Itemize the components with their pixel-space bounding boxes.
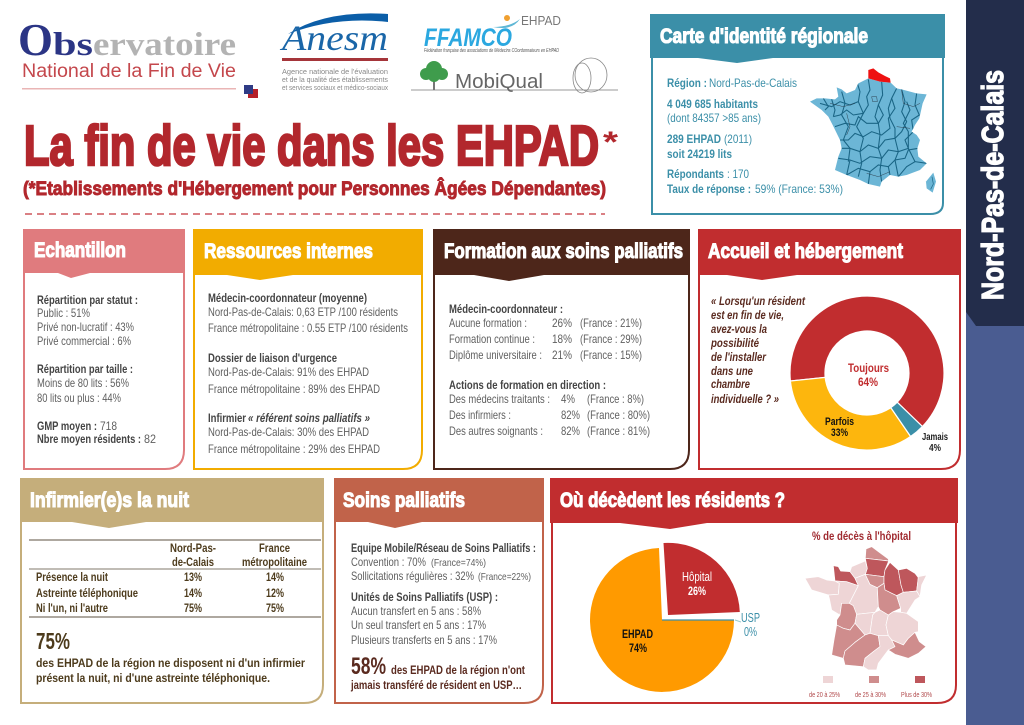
logo: FFAMCO EHPAD bbox=[424, 13, 561, 54]
logo: FFAMCO EHPAD: FFAMCO bbox=[424, 24, 512, 52]
subtitle: (*Etablissements d'Hébergement pour Personnes Âgées Dépendantes) bbox=[23, 178, 606, 200]
text: actions de formation: (France : 80%) bbox=[587, 408, 650, 422]
text: question: individuelle ? » bbox=[711, 392, 779, 406]
text: équipes et unités: Un seul transfert en 5 ans : 17% bbox=[351, 618, 486, 632]
text: question bbox=[710, 294, 806, 406]
text: médecin-coordonnateur: (France : 29%) bbox=[580, 332, 642, 346]
text: répartition de l'échantillon: Privé commercial : 6% bbox=[37, 334, 131, 348]
donut chart: possibilité de chambre individuelle: Parfois bbox=[825, 416, 854, 428]
table: présence infirmière: métropolitaine bbox=[242, 555, 307, 569]
text: médecin-coordonnateur: Formation continue : bbox=[449, 332, 535, 346]
text: médecin-coordonnateur: Aucune formation : bbox=[449, 316, 527, 330]
table: présence infirmière: 13% bbox=[184, 570, 202, 584]
text: répartition de l'échantillon: Répartition par taille : bbox=[37, 362, 133, 376]
text: répartition de l'échantillon: 82 bbox=[144, 432, 156, 446]
callout: 75%: 75% bbox=[36, 628, 70, 654]
text: ressources: Dossier de liaison d'urgence bbox=[208, 351, 337, 365]
pie chart: lieu de décès: Hôpital bbox=[682, 570, 712, 584]
heading: où décèdent: Où décèdent les résidents ? bbox=[560, 489, 785, 512]
text: ressources: Infirmier bbox=[208, 411, 246, 425]
panel: carte d'identité régionale bbox=[650, 14, 945, 214]
panel: où décèdent les résidents bbox=[550, 478, 958, 703]
text: répartition de l'échantillon: Public : 51% bbox=[37, 306, 90, 320]
table: présence infirmière: 75% bbox=[184, 601, 202, 615]
heading: echantillon: Echantillon bbox=[34, 239, 126, 262]
text: médecin-coordonnateur: 18% bbox=[552, 332, 572, 346]
callout: 58%: jamais transféré de résident en USP… bbox=[350, 678, 522, 692]
logo: Observatoire National de la Fin de Vie bbox=[18, 14, 258, 98]
logo: Anesm: et de la qualité des établissements bbox=[282, 77, 388, 84]
pie chart: lieu de décès: USP bbox=[741, 610, 760, 625]
text: identité de la région: Taux de réponse : bbox=[667, 182, 751, 196]
donut chart: possibilité de chambre individuelle: Toujours bbox=[848, 361, 889, 375]
text: ressources bbox=[208, 291, 408, 456]
text: répartition de l'échantillon: Moins de 80 lits : 56% bbox=[37, 376, 129, 390]
table: présence infirmière: Astreinte téléphonique bbox=[36, 586, 138, 600]
text: actions de formation: 4% bbox=[561, 392, 575, 406]
text: actions de formation: Des médecins traitants : bbox=[449, 392, 550, 406]
logo: Anesm: Agence nationale de l'évaluation bbox=[282, 69, 388, 76]
donut chart: possibilité de chambre individuelle: 4% bbox=[929, 443, 941, 454]
text: répartition de l'échantillon: 80 lits ou plus : 44% bbox=[37, 391, 121, 405]
text: ressources: France métropolitaine : 89% des EHPAD bbox=[208, 382, 380, 396]
text: identité de la région: soit 24219 lits bbox=[667, 147, 732, 161]
heading: carte d'identité: Carte d'identité régionale bbox=[660, 25, 868, 48]
map heading: % de décès à l'hôpital: % de décès à l'hôpital bbox=[812, 529, 911, 543]
text: identité de la région bbox=[667, 76, 843, 196]
text: identité de la région: (2011) bbox=[724, 132, 752, 146]
text: question: dans une bbox=[711, 364, 753, 378]
text: ressources: Nord-Pas-de-Calais: 0,63 ETP /100 résidents bbox=[208, 305, 398, 319]
table: présence infirmière: 12% bbox=[266, 586, 284, 600]
donut chart: possibilité de chambre individuelle bbox=[790, 296, 948, 454]
text: identité de la région: Répondants bbox=[667, 167, 724, 181]
panel: infirmier(e)s la nuit bbox=[20, 478, 324, 703]
text: question: possibilité bbox=[710, 336, 759, 350]
table: présence infirmière: 75% bbox=[266, 601, 284, 615]
text: équipes et unités: (France=74%) bbox=[431, 557, 486, 569]
text: identité de la région: 289 EHPAD bbox=[667, 132, 721, 146]
text: répartition de l'échantillon: GMP moyen : bbox=[37, 419, 97, 433]
logo: MobiQual: MobiQual bbox=[455, 71, 543, 93]
text: ressources: Nord-Pas-de-Calais: 30% des EHPAD bbox=[208, 425, 369, 439]
text: équipes et unités: Convention : 70% bbox=[351, 555, 426, 569]
table: présence infirmière: France bbox=[259, 541, 290, 555]
text: ressources: France métropolitaine : 0.55 ETP /100 résidents bbox=[208, 321, 408, 335]
text: actions de formation: (France : 81%) bbox=[587, 424, 650, 438]
text: actions de formation: Actions de formation en direction : bbox=[449, 378, 606, 392]
text: répartition de l'échantillon: Répartition par statut : bbox=[37, 293, 138, 307]
logo: Observatoire National de la Fin de Vie: bs bbox=[53, 27, 93, 63]
text: identité de la région: 4 049 685 habitants bbox=[667, 97, 758, 111]
text: ressources: France métropolitaine : 29% des EHPAD bbox=[208, 442, 380, 456]
heading: ressources internes: Ressources internes bbox=[204, 240, 373, 263]
text: médecin-coordonnateur: 26% bbox=[552, 316, 572, 330]
donut chart: possibilité de chambre individuelle: Jamais bbox=[922, 432, 948, 443]
logo: Anesm bbox=[280, 13, 388, 92]
text: équipes et unités: Unités de Soins Palliatifs (USP) : bbox=[351, 590, 498, 604]
title: * bbox=[603, 126, 618, 159]
text: identité de la région: 59% (France: 53%) bbox=[755, 182, 843, 196]
text: actions de formation: Des infirmiers : bbox=[449, 408, 511, 422]
text: répartition de l'échantillon: 718 bbox=[100, 419, 117, 433]
callout: 75%: des EHPAD de la région ne disposent ni d'un infirmier bbox=[36, 656, 305, 670]
legend: pourcentages bbox=[809, 676, 932, 699]
text: identité de la région: (dont 84357 >85 ans) bbox=[667, 111, 761, 125]
logo: Observatoire National de la Fin de Vie: ervatoire bbox=[93, 27, 236, 63]
table: présence infirmière bbox=[29, 540, 321, 617]
map: France with region highlighted bbox=[810, 68, 936, 193]
text: question: de l'installer bbox=[711, 350, 767, 364]
text: équipes et unités: Equipe Mobile/Réseau de Soins Palliatifs : bbox=[351, 541, 536, 555]
text: question: avez-vous la bbox=[711, 322, 767, 336]
legend: pourcentages: de 20 à 25% bbox=[809, 690, 840, 699]
callout: 58%: des EHPAD de la région n'ont bbox=[391, 663, 525, 677]
text: médecin-coordonnateur: (France : 21%) bbox=[580, 316, 642, 330]
logo: Observatoire National de la Fin de Vie: National de la Fin de Vie bbox=[22, 61, 236, 82]
table: présence infirmière: Présence la nuit bbox=[36, 570, 108, 584]
text: équipes et unités: (France=22%) bbox=[478, 571, 531, 583]
text: actions de formation: 82% bbox=[561, 408, 580, 422]
text: ressources: Médecin-coordonnateur (moyenne) bbox=[208, 291, 367, 305]
text: question: est en fin de vie, bbox=[711, 308, 784, 322]
table: présence infirmière: 14% bbox=[266, 570, 284, 584]
text: médecin-coordonnateur: 21% bbox=[552, 348, 572, 362]
pie chart: lieu de décès bbox=[590, 543, 760, 692]
callout: 75% bbox=[36, 628, 305, 685]
text: équipes et unités: Plusieurs transferts en 5 ans : 17% bbox=[351, 633, 497, 647]
text: ressources: Nord-Pas-de-Calais: 91% des EHPAD bbox=[208, 365, 369, 379]
text: actions de formation: Des autres soignants : bbox=[449, 424, 543, 438]
text: équipes et unités: Sollicitations régulières : 32% bbox=[351, 569, 474, 583]
callout: 75%: présent la nuit, ni d'une astreinte téléphonique. bbox=[36, 671, 270, 685]
text: actions de formation: 82% bbox=[561, 424, 580, 438]
text: répartition de l'échantillon: Nbre moyen résidents : bbox=[37, 432, 141, 446]
text: médecin-coordonnateur bbox=[449, 302, 642, 362]
table: présence infirmière: 14% bbox=[184, 586, 202, 600]
logo: MobiQual bbox=[411, 58, 618, 93]
logo: Anesm: et services sociaux et médico-sociaux bbox=[282, 85, 388, 92]
callout: 58%: 58% bbox=[351, 653, 386, 680]
callout: 58% bbox=[350, 653, 525, 692]
heading: accueil: Accueil et hébergement bbox=[708, 240, 903, 263]
donut chart: possibilité de chambre individuelle: 33% bbox=[831, 427, 848, 439]
panel: echantillon bbox=[23, 229, 185, 469]
sidebar: region name bbox=[966, 0, 1024, 725]
text: identité de la région: Nord-Pas-de-Calais bbox=[709, 76, 797, 90]
logo: Observatoire National de la Fin de Vie: O bbox=[18, 14, 53, 65]
text: répartition de l'échantillon bbox=[37, 293, 156, 446]
panel: accueil et hébergement bbox=[698, 229, 961, 469]
text: question: « Lorsqu'un résident bbox=[711, 294, 806, 308]
heading: infirmier: Infirmier(e)s la nuit bbox=[30, 489, 189, 512]
text: actions de formation bbox=[449, 378, 650, 438]
donut chart: possibilité de chambre individuelle: 64% bbox=[858, 375, 878, 389]
table: présence infirmière: Nord-Pas- bbox=[170, 541, 216, 555]
text: équipes et unités: Aucun transfert en 5 ans : 58% bbox=[351, 604, 481, 618]
map: décès à l'hôpital par région bbox=[805, 547, 927, 670]
logo: Anesm: Anesm bbox=[280, 18, 388, 58]
pie chart: lieu de décès: 0% bbox=[744, 624, 757, 639]
heading: formation: Formation aux soins palliatifs bbox=[444, 240, 683, 263]
table: présence infirmière: Ni l'un, ni l'autre bbox=[36, 601, 108, 615]
text: médecin-coordonnateur: (France : 15%) bbox=[580, 348, 642, 362]
logo: FFAMCO EHPAD: Fédération française des associations de Médecins COordonnateurs en EHPAD bbox=[424, 48, 559, 54]
legend: pourcentages: Plus de 30% bbox=[901, 690, 932, 699]
table: présence infirmière: de-Calais bbox=[172, 555, 214, 569]
text: actions de formation: (France : 8%) bbox=[587, 392, 644, 406]
sidebar: region name: Nord-Pas-de-Calais bbox=[975, 70, 1010, 300]
legend: pourcentages: de 25 à 30% bbox=[855, 690, 886, 699]
text: identité de la région: : 170 bbox=[727, 167, 749, 181]
title: La fin de vie dans les EHPAD bbox=[24, 114, 599, 178]
panel: ressources internes bbox=[193, 229, 423, 469]
pie chart: lieu de décès: EHPAD bbox=[622, 627, 653, 641]
pie chart: lieu de décès: 26% bbox=[688, 584, 706, 598]
pie chart: lieu de décès: 74% bbox=[629, 641, 647, 655]
text: répartition de l'échantillon: Privé non-lucratif : 43% bbox=[37, 320, 134, 334]
panel: formation aux soins palliatifs bbox=[433, 229, 690, 469]
text: médecin-coordonnateur: Diplôme universitaire : bbox=[449, 348, 542, 362]
text: identité de la région: Région : bbox=[667, 76, 707, 90]
text: ressources: « référent soins palliatifs » bbox=[248, 411, 370, 425]
logo: FFAMCO EHPAD: EHPAD bbox=[521, 13, 561, 28]
heading: soins palliatifs: Soins palliatifs bbox=[343, 489, 465, 512]
panel: soins palliatifs bbox=[334, 478, 544, 703]
text: question: chambre bbox=[711, 377, 750, 391]
text: équipes et unités bbox=[351, 541, 536, 647]
text: médecin-coordonnateur: Médecin-coordonnateur : bbox=[449, 302, 563, 316]
